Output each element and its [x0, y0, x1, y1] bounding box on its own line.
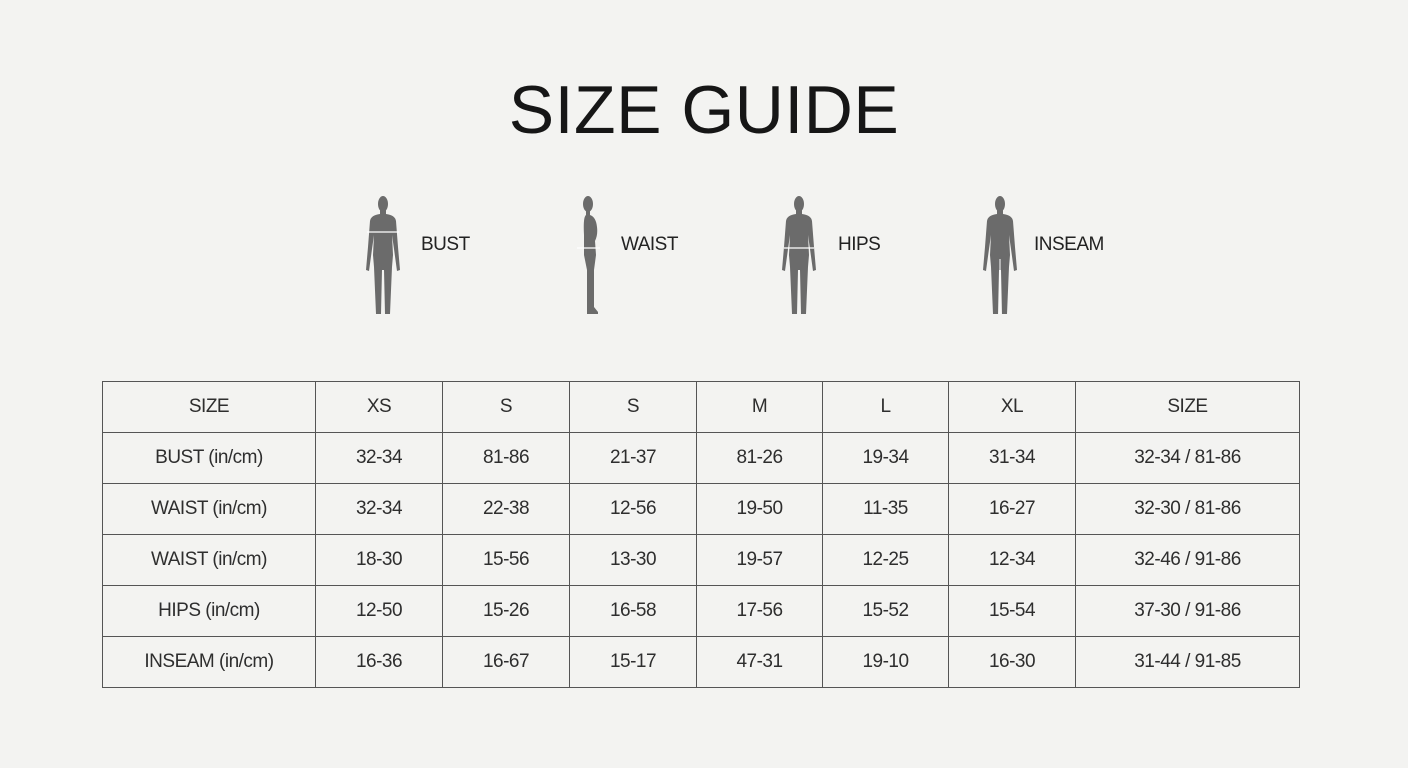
size table: 81-86	[483, 447, 529, 468]
size table: INSEAM (in/cm)	[144, 651, 274, 672]
label: waist: WAIST	[621, 234, 678, 255]
size table: 12-50	[356, 600, 402, 621]
size table: XS	[367, 396, 391, 417]
label: bust: BUST	[421, 234, 470, 255]
size table: SIZE	[189, 396, 229, 417]
size table: 18-30	[356, 549, 402, 570]
size table: 37-30 / 91-86	[1134, 600, 1241, 621]
label: inseam: INSEAM	[1034, 234, 1104, 255]
size table: 15-17	[610, 651, 656, 672]
size table: BUST (in/cm)	[155, 447, 263, 468]
size table: 16-30	[989, 651, 1035, 672]
size table: 19-57	[736, 549, 783, 570]
size table: S	[627, 396, 639, 417]
size table: 12-34	[989, 549, 1035, 570]
size table: 16-67	[483, 651, 529, 672]
size table: 31-44 / 91-85	[1134, 651, 1241, 672]
icon: bust figure	[366, 196, 400, 314]
size table: 47-31	[736, 651, 783, 672]
size table: 16-36	[356, 651, 402, 672]
size table: 21-37	[610, 447, 656, 468]
size table: 19-10	[862, 651, 909, 672]
size table: SIZE	[1167, 396, 1208, 417]
size table: 12-25	[862, 549, 909, 570]
size table: 12-56	[610, 498, 656, 519]
size table: 22-38	[483, 498, 529, 519]
size table: 15-54	[989, 600, 1035, 621]
size table: 16-58	[610, 600, 656, 621]
size table: 32-34	[356, 498, 402, 519]
icon: inseam figure	[983, 196, 1017, 314]
size table: 15-56	[483, 549, 529, 570]
size table: 32-30 / 81-86	[1134, 498, 1241, 519]
size table: 11-35	[863, 498, 908, 519]
size table: 32-46 / 91-86	[1134, 549, 1241, 570]
size table: 32-34 / 81-86	[1134, 447, 1241, 468]
size table: S	[500, 396, 512, 417]
size table: 17-56	[736, 600, 783, 621]
size table: WAIST (in/cm)	[151, 498, 267, 519]
size table: 15-26	[483, 600, 529, 621]
size table: WAIST (in/cm)	[151, 549, 267, 570]
size table: 15-52	[862, 600, 909, 621]
size table	[102, 381, 1300, 688]
size table: L	[880, 396, 891, 417]
icon: hips figure	[782, 196, 816, 314]
icon: waist figure (side)	[577, 196, 600, 314]
size table: 31-34	[989, 447, 1035, 468]
title: SIZE GUIDE	[509, 72, 899, 148]
size table: 16-27	[989, 498, 1035, 519]
size table: HIPS (in/cm)	[158, 600, 260, 621]
size table: 81-26	[736, 447, 783, 468]
size table: M	[752, 396, 767, 417]
size table: 19-34	[862, 447, 909, 468]
size table: 19-50	[736, 498, 783, 519]
label: hips: HIPS	[838, 234, 880, 255]
size table: 32-34	[356, 447, 402, 468]
size table: XL	[1001, 396, 1023, 417]
size table: 13-30	[610, 549, 656, 570]
